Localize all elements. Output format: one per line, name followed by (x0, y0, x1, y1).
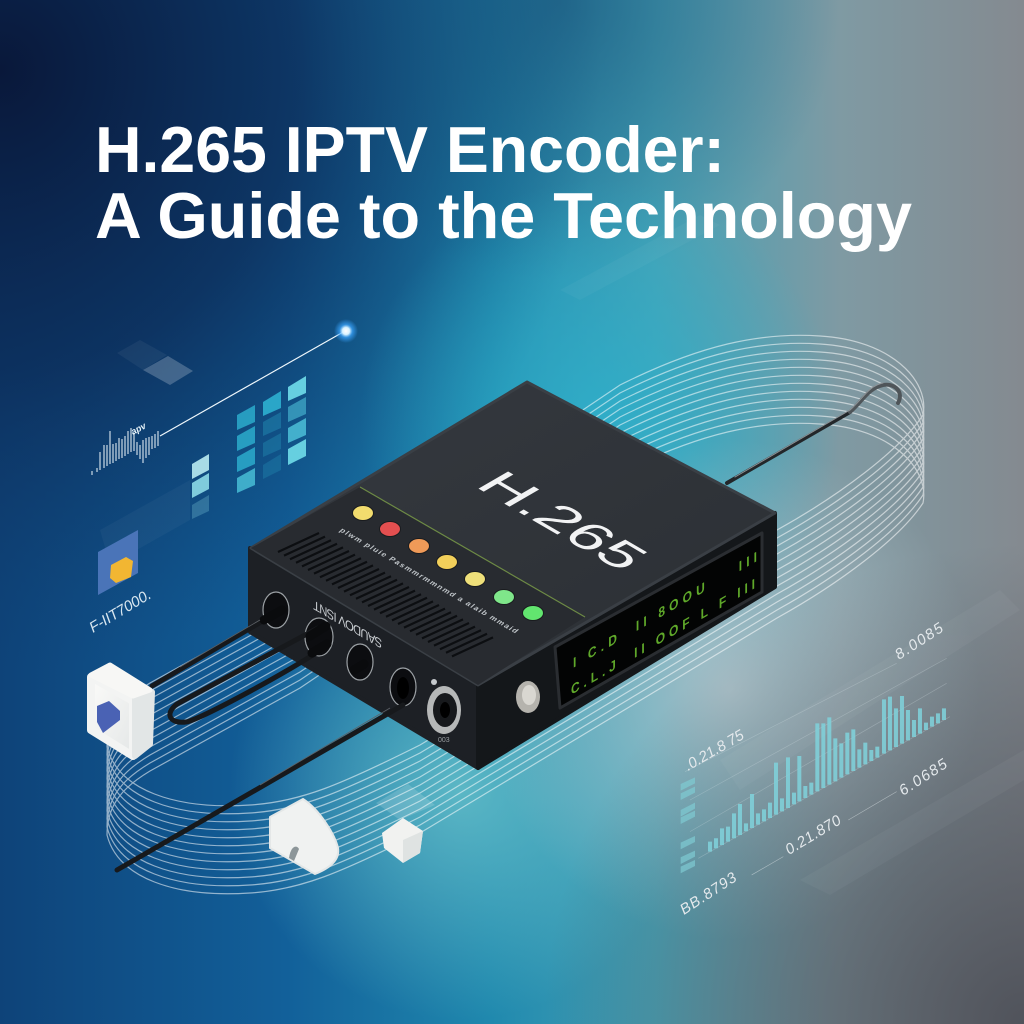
soft light streaks (100, 215, 1024, 895)
label: model number: F-IIT7000. (86, 586, 154, 636)
chart value labels (677, 619, 951, 918)
icon: blue panel with yellow chip (98, 530, 138, 595)
faded diamonds (117, 340, 193, 385)
small waveform label: apv (129, 420, 149, 437)
chart value labels: 0.21.870 (782, 812, 845, 858)
side label: SAUDOV ISNT (313, 597, 382, 652)
status LEDs (352, 506, 544, 620)
LCD display (555, 533, 762, 708)
cable connectors at ports (264, 610, 364, 670)
bar chart (681, 658, 950, 875)
chart value labels: BB.8793 (677, 869, 740, 918)
title (95, 113, 912, 252)
jack caption: 003 (438, 737, 450, 744)
data tile columns (192, 376, 306, 519)
right cable (727, 383, 900, 483)
cables (117, 612, 403, 870)
chart bars (710, 696, 944, 852)
device top face (251, 382, 775, 685)
chart value labels: .0.21.8 75 (682, 726, 748, 774)
LED panel band (251, 487, 585, 685)
encoder device (250, 382, 775, 768)
divider line (360, 487, 585, 617)
ports (263, 592, 437, 706)
device logo H.265: H.265 (464, 463, 661, 578)
chart axis connector lines (752, 792, 897, 875)
title: A Guide to the Technology (95, 179, 912, 252)
glowing signal node (334, 319, 358, 343)
panel micro text: plwm pluie Pasmmrmmnmd a alaib mmaid (338, 527, 521, 635)
chart value labels: 8.0085 (892, 619, 947, 663)
device right face (478, 513, 775, 768)
LCD display: I C.D II 8OOU III (573, 548, 757, 671)
air vent slats (278, 533, 493, 656)
LCD display: C.L.J II OOF L F III (571, 575, 755, 698)
device left face (250, 548, 478, 768)
cable sheen (180, 620, 390, 785)
title: H.265 IPTV Encoder: (95, 113, 725, 186)
chart grid lines (685, 658, 950, 858)
chart legend blocks (681, 777, 695, 873)
chart value labels: 6.0685 (896, 755, 951, 799)
power button (516, 681, 540, 713)
translucent floating tile (376, 784, 435, 820)
white arched block (270, 799, 338, 874)
signal wave ribbon (107, 335, 924, 894)
white cube (382, 818, 423, 863)
waveform with signal line (92, 331, 345, 475)
round silver jack (427, 686, 461, 734)
blue connector (97, 701, 120, 733)
white adapter box (91, 665, 152, 756)
